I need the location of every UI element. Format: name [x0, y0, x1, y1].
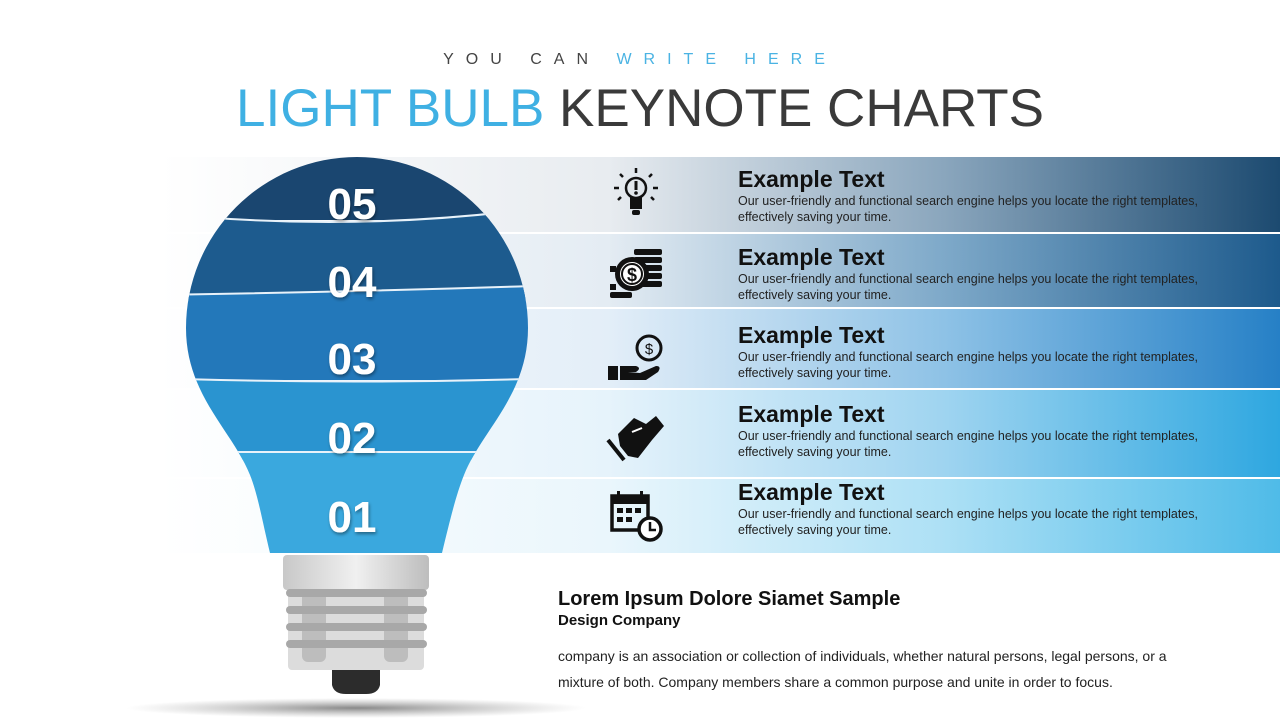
numbers — [328, 180, 377, 542]
numbers: 05 — [328, 180, 376, 229]
text row 4 — [738, 244, 1198, 302]
band 3 — [160, 309, 1280, 388]
text: Our user-friendly and functional search engine helps you locate the right templates, effectively saving your time. — [738, 429, 1198, 459]
icon: hand with coin — [608, 334, 662, 380]
icon: coins: $ — [627, 265, 637, 285]
text: Example Text — [738, 244, 885, 270]
icon: coins — [610, 249, 662, 298]
shadow — [126, 698, 586, 718]
subtitle: YOU CAN WRITE HERE — [443, 51, 837, 68]
text: Our user-friendly and functional search engine helps you locate the right templates, effectively saving your time. — [738, 194, 1198, 224]
text: Our user-friendly and functional search engine helps you locate the right templates, effectively saving your time. — [738, 272, 1198, 302]
text row 3 — [738, 322, 1198, 380]
bottom text block — [558, 588, 1167, 690]
bottom text block: Lorem Ipsum Dolore Siamet Sample — [558, 588, 900, 610]
text: Example Text — [738, 479, 885, 505]
light bulb — [148, 157, 564, 717]
band 2 — [160, 390, 1280, 477]
text: Example Text — [738, 322, 885, 348]
text: Our user-friendly and functional search engine helps you locate the right templates, effectively saving your time. — [738, 350, 1198, 380]
text: Example Text — [738, 166, 885, 192]
icon: idea bulb — [614, 168, 658, 215]
numbers: 02 — [328, 414, 376, 463]
numbers: 03 — [328, 335, 376, 384]
title: LIGHT BULB KEYNOTE CHARTS — [236, 79, 1044, 138]
band 4 — [160, 234, 1280, 307]
icon: calendar clock — [610, 491, 663, 542]
bulb base — [283, 555, 429, 694]
text: Our user-friendly and functional search engine helps you locate the right templates, effectively saving your time. — [738, 507, 1198, 537]
band 1 — [160, 479, 1280, 553]
text row 5 — [738, 166, 1198, 224]
numbers: 04 — [328, 258, 377, 307]
icon: hand with coin: $ — [645, 341, 654, 358]
icon: handshake — [606, 416, 664, 462]
text row 2 — [738, 401, 1198, 459]
text: Example Text — [738, 401, 885, 427]
text row 1 — [738, 479, 1198, 537]
numbers: 01 — [328, 493, 376, 542]
bottom text block: Design Company — [558, 612, 681, 629]
bottom text block: company is an association or collection of individuals, whether natural persons, legal persons, or a mixture of both. Company members share a common purpose and unite in order to focus. — [558, 648, 1167, 690]
band 5 — [160, 157, 1280, 232]
